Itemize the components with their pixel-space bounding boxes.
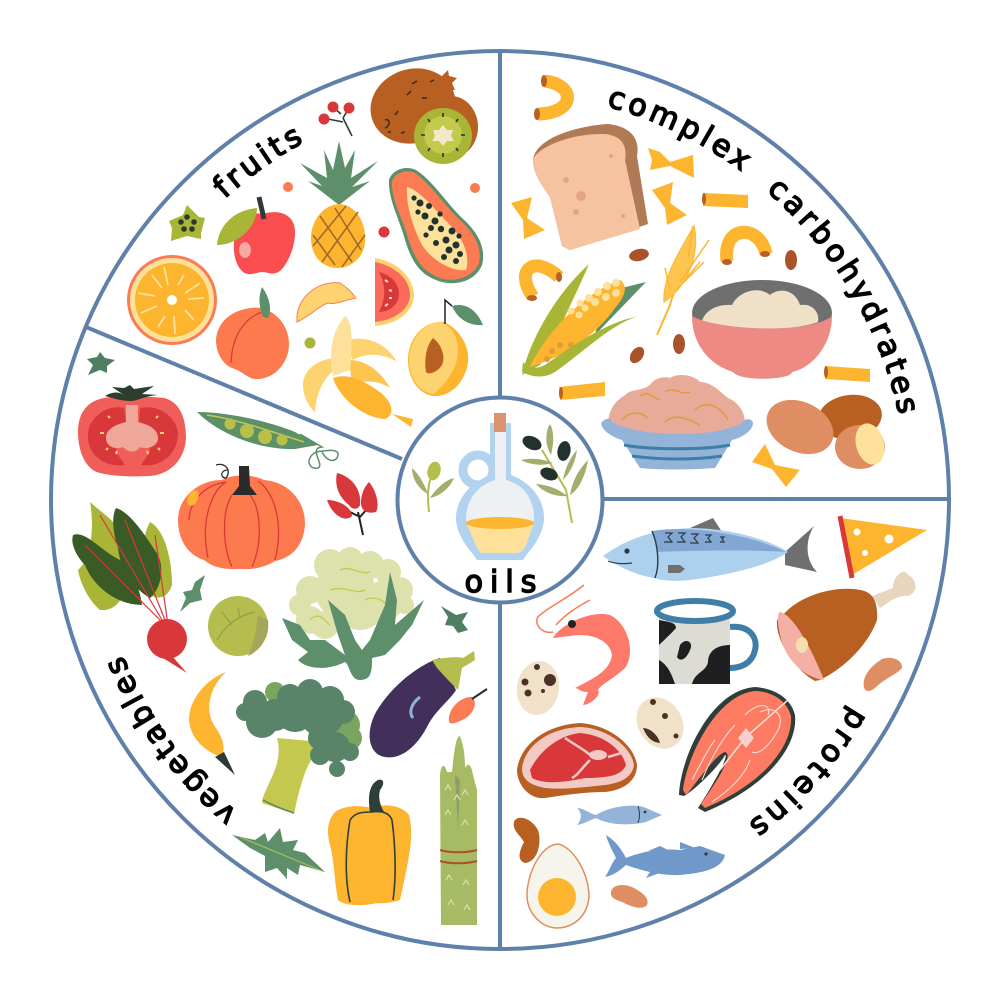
icon: plum half <box>408 300 483 396</box>
icon: arugula leaf <box>232 828 325 879</box>
icon: papaya <box>389 168 483 283</box>
heading: oils: oils <box>465 565 543 600</box>
icon: guava slice <box>375 258 414 326</box>
icon: oat dish <box>601 375 753 470</box>
panel: fruits <box>127 68 484 427</box>
icon: wheat <box>657 226 709 335</box>
icon: arugula sprig <box>180 575 205 612</box>
icon: cauliflower <box>282 547 424 680</box>
icon: steak <box>517 723 637 798</box>
icon: macaroni pieces <box>525 81 766 297</box>
icon: cabbage <box>208 596 268 656</box>
icon: olive branch left <box>412 460 454 512</box>
icon: cow mug <box>657 601 756 684</box>
icon: bell pepper <box>328 780 411 905</box>
icon: peach slice <box>297 283 356 322</box>
icon: banana <box>303 316 413 427</box>
icon: apple <box>217 197 295 274</box>
icon: chard with beet <box>72 502 187 673</box>
icon: oil bottle <box>456 413 544 560</box>
icon: bottom bean <box>611 885 648 908</box>
icon: star fruit <box>169 205 205 241</box>
panel: complex carbohydrates <box>511 74 915 487</box>
icon: quail eggs <box>513 658 693 758</box>
icon: small pepper <box>449 689 487 723</box>
icon: olive branch right <box>520 424 588 523</box>
heading: complex carbohydrates: complex carbohydrates <box>609 92 915 414</box>
icon: asparagus <box>440 736 477 925</box>
icon: cheese <box>840 516 927 578</box>
icon: parsley sprig <box>87 352 115 375</box>
icon: orange bean <box>864 658 902 691</box>
icon: star fruit seeds <box>178 214 197 232</box>
panel: oils <box>412 413 588 600</box>
icon: blue fish <box>605 835 725 878</box>
heading: fruits: fruits <box>212 128 302 198</box>
icon: berries <box>318 102 354 136</box>
icon: seeds <box>627 247 797 366</box>
icon: kiwi <box>361 58 478 164</box>
icon: eggplant <box>370 651 475 757</box>
icon: pea pod <box>197 412 338 468</box>
icon: shrimp <box>537 585 630 705</box>
icon: broccoli <box>236 679 362 814</box>
icon: corn <box>522 264 646 376</box>
icon: small berries <box>283 182 480 348</box>
icon: pineapple <box>300 141 378 268</box>
icon: peach <box>216 287 289 379</box>
icon: small fish <box>577 806 662 825</box>
icon: macaroni ends <box>527 75 770 301</box>
icon: potatoes <box>758 390 889 469</box>
icon: tomato <box>78 385 186 476</box>
icon: red chili peppers <box>327 473 378 535</box>
icon: bowl of porridge <box>692 280 832 379</box>
icon: boiled egg <box>527 844 589 928</box>
icon: farfalle pasta <box>511 148 800 487</box>
heading: proteins: proteins <box>750 704 866 836</box>
icon: salmon steak <box>679 687 795 812</box>
icon: orange slice <box>127 255 217 345</box>
heading: vegetables: vegetables <box>108 657 234 826</box>
icon: large fish <box>603 518 817 581</box>
icon: parsley right <box>441 606 468 633</box>
panel: proteins <box>514 516 927 929</box>
icon: pumpkin <box>178 464 305 569</box>
icon: yellow chili <box>189 672 235 775</box>
icon: tube ends <box>559 193 828 399</box>
panel: vegetables <box>72 352 488 925</box>
icon: brown bean <box>514 818 539 863</box>
icon: bread <box>533 124 648 250</box>
icon: ham <box>777 572 916 681</box>
icon: penne tubes <box>559 193 870 400</box>
